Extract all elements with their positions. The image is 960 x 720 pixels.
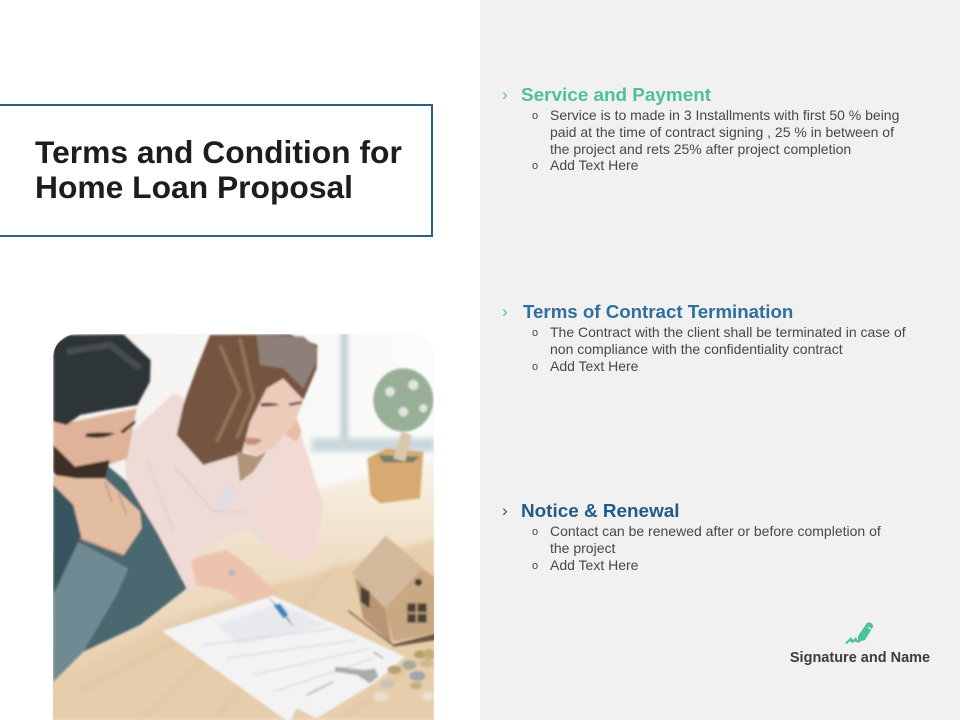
- heading: Service and Payment: [521, 85, 711, 106]
- heading: Terms of Contract Termination: [523, 301, 793, 322]
- bullet list: Add Text Here: [550, 358, 638, 374]
- bullet list: o: [532, 526, 538, 538]
- photo: couple reviewing a home loan document: [53, 334, 434, 720]
- chevron: ›: [502, 302, 508, 321]
- bullet list: o: [532, 560, 538, 572]
- bullet list: [532, 107, 899, 173]
- bullet list: Contact can be renewed after or before completion of: [550, 523, 881, 539]
- title box: [0, 104, 433, 237]
- heading: Notice & Renewal: [521, 501, 680, 522]
- bullet list: o: [532, 361, 538, 373]
- bullet list: Add Text Here: [550, 157, 638, 173]
- title: Home Loan Proposal: [35, 169, 353, 205]
- bullet list: non compliance with the confidentiality contract: [550, 341, 843, 357]
- bullet list: Service is to made in 3 Installments with first 50 % being: [550, 107, 899, 123]
- right background panel: [480, 0, 960, 720]
- section: Service and Payment: [502, 85, 899, 173]
- bullet list: paid at the time of contract signing , 25 % in between of: [550, 124, 894, 140]
- woman: [124, 393, 286, 581]
- bullet list: o: [532, 327, 538, 339]
- section: Terms of Contract Termination: [502, 301, 906, 374]
- title: [35, 134, 402, 205]
- icon: signature pen: [845, 622, 874, 644]
- bullet list: o: [532, 110, 538, 122]
- man's body: [53, 465, 187, 682]
- chevron: ›: [502, 85, 508, 104]
- woman's hand and ring: [191, 550, 273, 602]
- man's hand: [53, 475, 142, 556]
- bullet list: Add Text Here: [550, 557, 638, 573]
- pen: [269, 598, 294, 627]
- man's hair: [53, 334, 151, 425]
- bullet list: [532, 523, 881, 573]
- contract paper: [162, 596, 405, 720]
- bullet list: the project and rets 25% after project completion: [550, 141, 851, 157]
- chevron: ›: [502, 501, 508, 520]
- bullet list: o: [532, 160, 538, 172]
- bullet list: The Contract with the client shall be terminated in case of: [550, 324, 906, 340]
- title: Terms and Condition for: [35, 134, 402, 170]
- bullet list: [532, 324, 906, 374]
- house model: [348, 610, 437, 647]
- coins and keys: [335, 667, 378, 683]
- man's face: [53, 408, 138, 468]
- plant: [367, 448, 423, 503]
- section: Notice & Renewal: [502, 501, 881, 573]
- bullet list: the project: [550, 540, 615, 556]
- signature label: Signature and Name: [790, 650, 930, 666]
